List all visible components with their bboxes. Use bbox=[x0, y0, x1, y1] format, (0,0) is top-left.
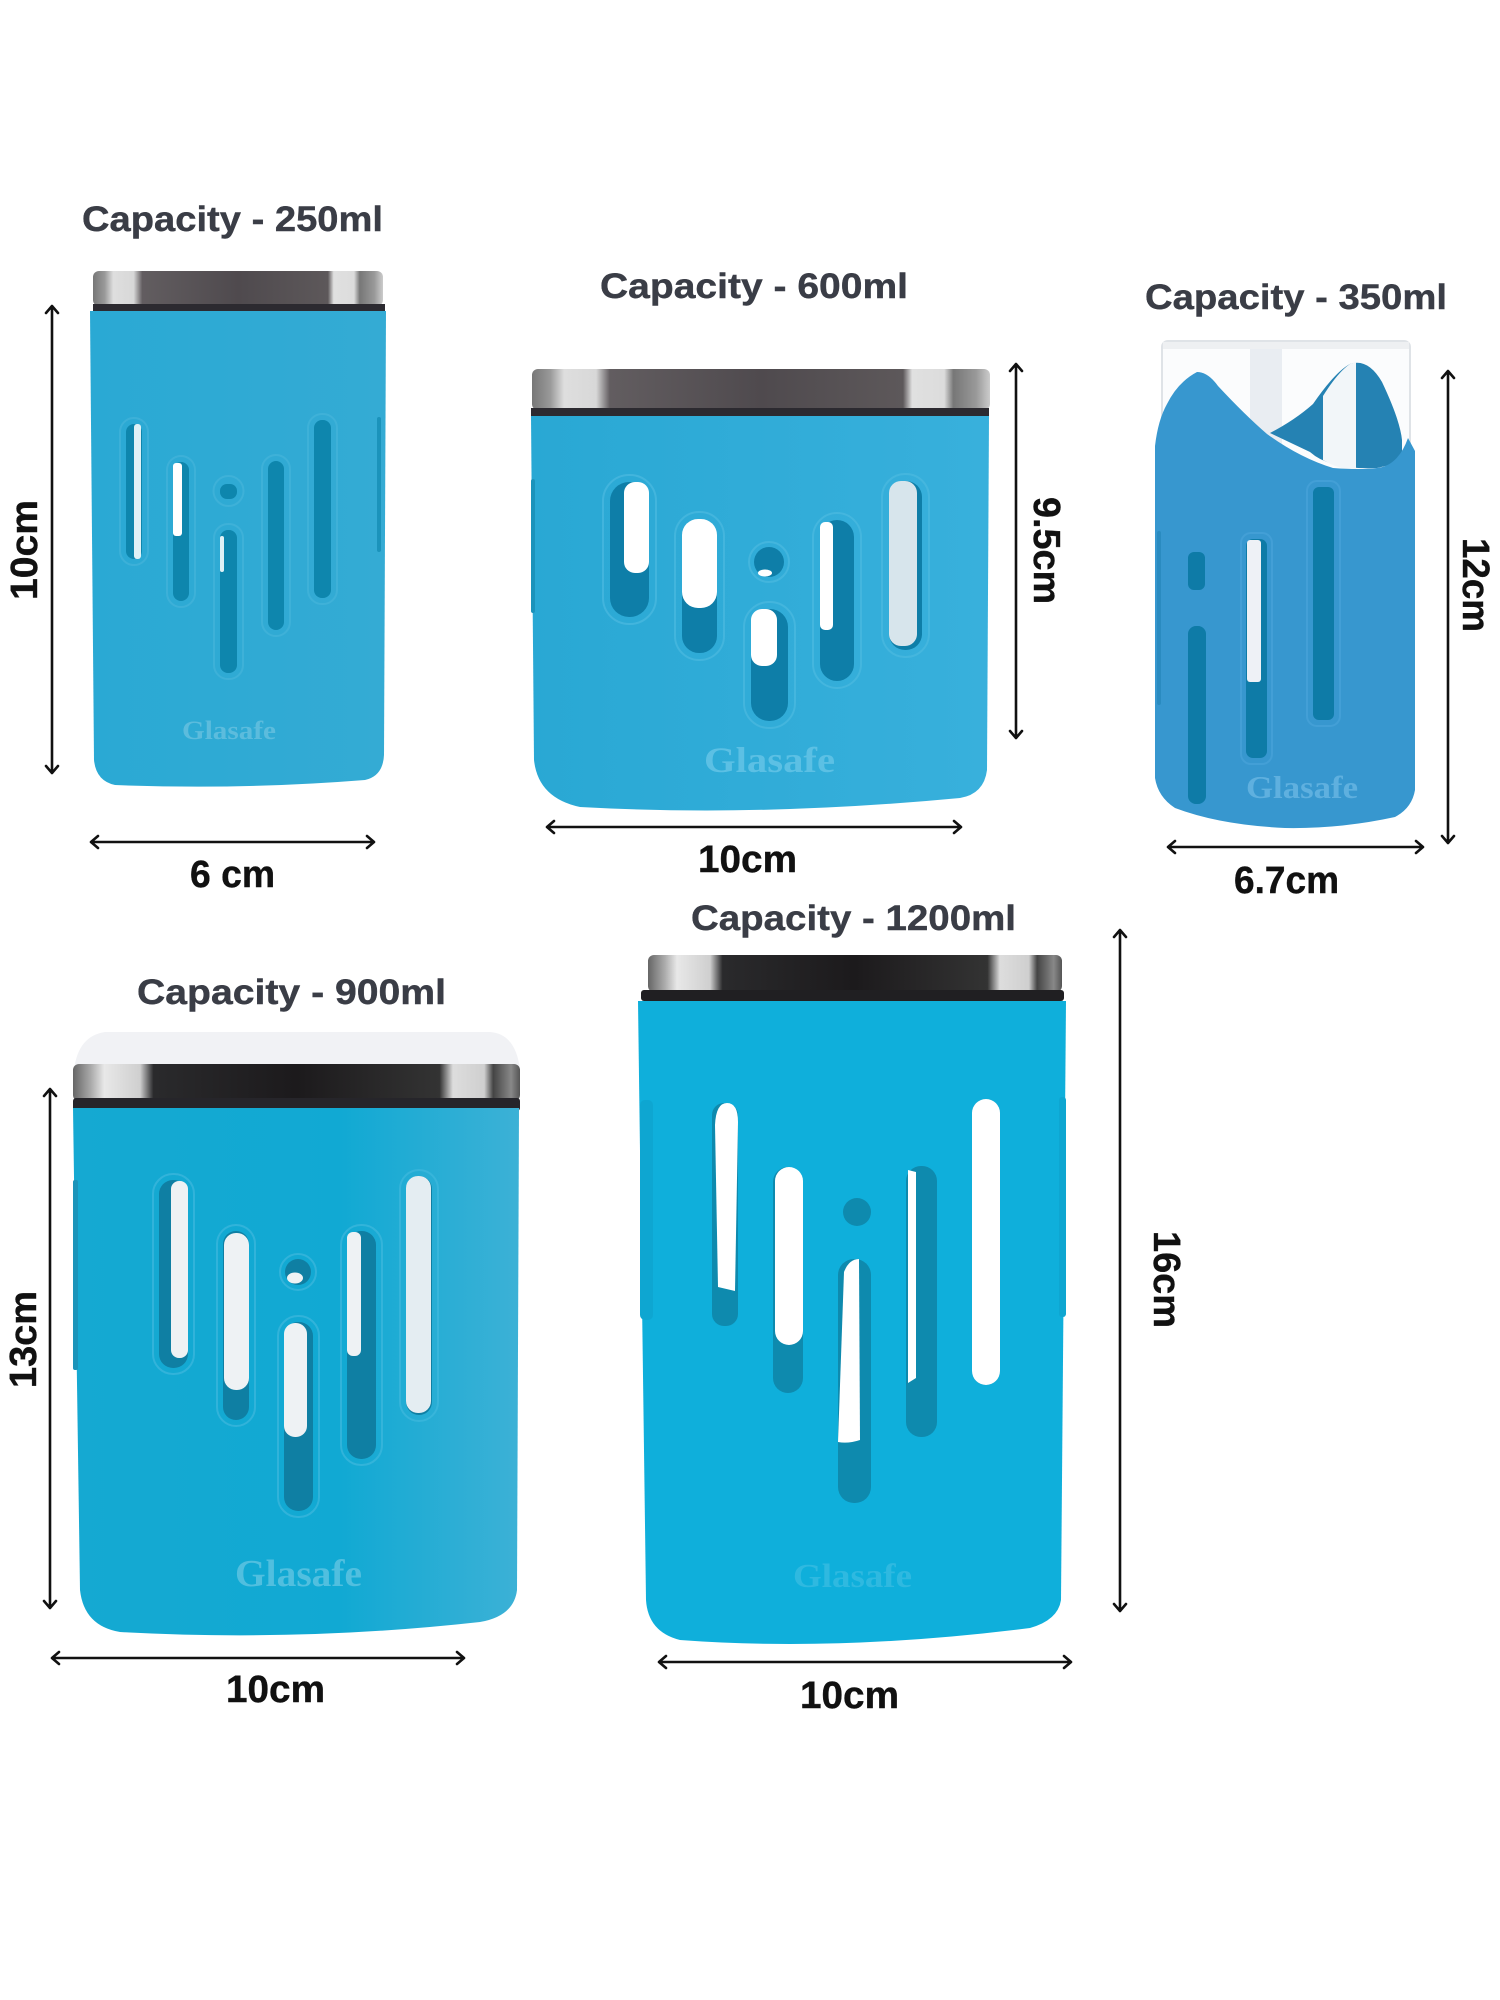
arrow: width bbox=[659, 1656, 1071, 1668]
dimension: 6.7cm width: 6.7cm bbox=[1234, 860, 1339, 902]
jar lid bbox=[93, 271, 385, 311]
dimension: 10cm width: 10cm bbox=[698, 839, 797, 881]
brand mark: Glasafe bbox=[182, 716, 276, 745]
heading: capacity 600ml: Capacity - 600ml bbox=[600, 267, 908, 306]
panel: 600ml jar bbox=[531, 267, 1067, 881]
panel: 900ml jar bbox=[3, 973, 520, 1711]
dimension: 10cm width: 10cm bbox=[800, 1675, 899, 1717]
arrow: width bbox=[91, 836, 374, 848]
arrow: height bbox=[1442, 371, 1454, 843]
arrow: width bbox=[547, 821, 961, 833]
jar lid bbox=[73, 1032, 520, 1111]
arrow: height bbox=[44, 1089, 56, 1608]
brand mark: Glasafe bbox=[1246, 769, 1358, 805]
jar lid bbox=[531, 369, 990, 416]
heading: capacity 350ml: Capacity - 350ml bbox=[1145, 278, 1447, 317]
panel: 1200ml jar bbox=[638, 899, 1187, 1717]
arrow: height bbox=[1114, 930, 1126, 1611]
cut-out slots bbox=[73, 1170, 438, 1517]
jar sleeve bbox=[90, 311, 386, 787]
dimension: 10cm height: 10cm bbox=[4, 500, 46, 600]
jar sleeve bbox=[638, 1001, 1066, 1644]
dimension: 13cm height: 13cm bbox=[3, 1291, 45, 1388]
glass tumbler bbox=[1162, 341, 1410, 481]
heading: capacity 250ml: Capacity - 250ml bbox=[82, 200, 383, 239]
dimension: 10cm width: 10cm bbox=[226, 1669, 325, 1711]
heading: capacity 900ml: Capacity - 900ml bbox=[137, 973, 446, 1012]
jar lid bbox=[641, 955, 1064, 1001]
arrow: height bbox=[46, 306, 58, 773]
dimension: 12cm height: 12cm bbox=[1454, 538, 1496, 632]
brand mark: Glasafe bbox=[235, 1553, 362, 1595]
cut-out slots bbox=[120, 414, 381, 679]
panel: 250ml jar bbox=[4, 200, 386, 896]
brand mark: Glasafe bbox=[793, 1558, 912, 1595]
dimension: 16cm height: 16cm bbox=[1145, 1231, 1187, 1328]
jar sleeve bbox=[73, 1108, 519, 1635]
arrow: height bbox=[1010, 364, 1022, 738]
arrow: width bbox=[1168, 841, 1423, 853]
cut-out slots bbox=[640, 1097, 1066, 1503]
heading: capacity 1200ml: Capacity - 1200ml bbox=[691, 899, 1016, 938]
dimension: 9.5cm height: 9.5cm bbox=[1025, 497, 1067, 604]
cut-out slots bbox=[531, 474, 929, 728]
jar sleeve bbox=[1155, 372, 1415, 828]
brand mark: Glasafe bbox=[704, 740, 835, 780]
cut-out slots bbox=[1157, 481, 1340, 804]
panel: 350ml jar bbox=[1145, 278, 1496, 902]
jar sleeve bbox=[531, 416, 989, 810]
dimension: 6 cm width: 6 cm bbox=[190, 854, 275, 896]
arrow: width bbox=[52, 1652, 464, 1664]
far side of sleeve seen through glass bbox=[1270, 362, 1402, 470]
